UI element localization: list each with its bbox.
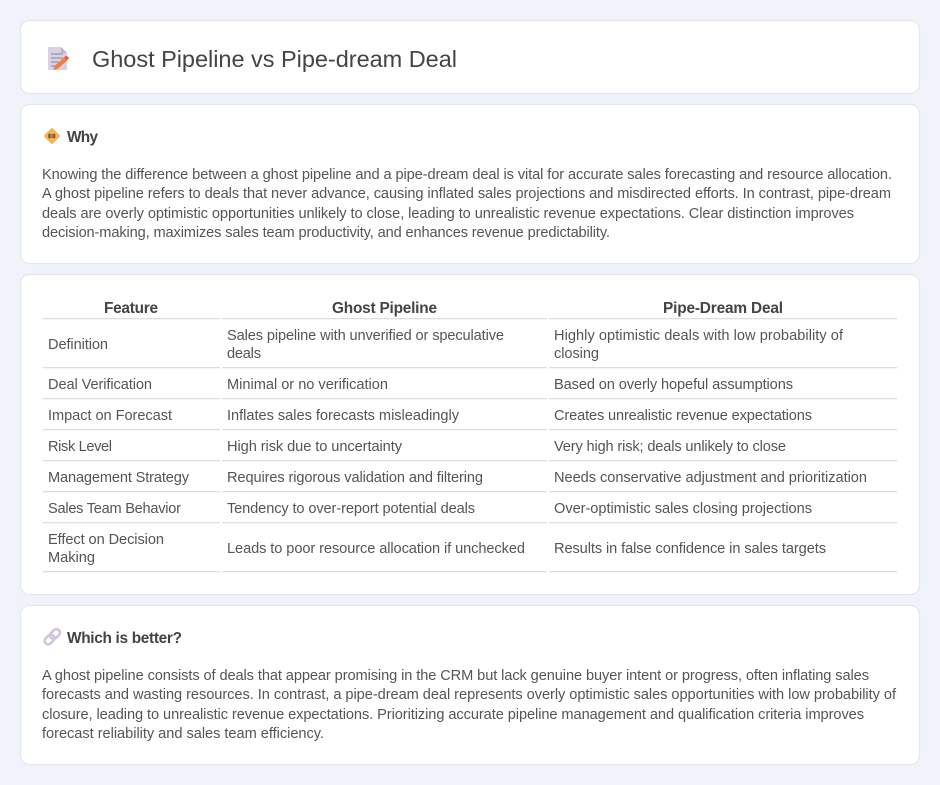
text block: which is better paragraph: closure, leading to unrealistic revenue expectations. Prioritizing accurate pipeline management and qualification criteria improves <box>42 707 864 723</box>
row: impact on forecast: Inflates sales forecasts misleadingly <box>227 408 460 424</box>
row: effect on decision making: Making <box>48 550 95 566</box>
row: effect on decision making: Results in false confidence in sales targets <box>554 541 826 557</box>
row: sales team behavior: Sales Team Behavior <box>48 501 181 517</box>
row: management strategy <box>48 470 867 486</box>
row: impact on forecast <box>48 408 812 424</box>
text block: why paragraph: deals are overly optimistic opportunities unlikely to close, leading to unrealistic revenue expectations. Clear distinction improves <box>42 206 854 222</box>
title: Ghost Pipeline vs Pipe-dream Deal <box>92 46 457 72</box>
panel: comparison table <box>20 274 920 594</box>
row: impact on forecast: Impact on Forecast <box>48 408 172 424</box>
row: sales team behavior: Over-optimistic sales closing projections <box>554 501 812 517</box>
panel: which is better <box>20 606 920 764</box>
text block: which is better paragraph: A ghost pipeline consists of deals that appear promising in the CRM but lack genuine buyer intent or progress, often inflating sales <box>42 668 869 684</box>
table header row: Feature <box>104 300 158 317</box>
text block: why paragraph: Knowing the difference between a ghost pipeline and a pipe-dream deal is vital for accurate sales forecasting and resource allocation. <box>42 167 892 183</box>
text block: which is better paragraph: forecast reliability and sales team efficiency. <box>42 726 324 742</box>
row: risk level: Risk Level <box>48 439 112 455</box>
row: sales team behavior <box>48 501 812 517</box>
row: risk level: Very high risk; deals unlikely to close <box>554 439 786 455</box>
row: deal verification: Based on overly hopeful assumptions <box>554 377 793 393</box>
row: definition: deals <box>227 346 261 362</box>
icon: chain link <box>43 628 61 646</box>
heading: why: Why <box>67 129 98 146</box>
row: deal verification: Minimal or no verification <box>227 377 388 393</box>
row: effect on decision making: Effect on Decision <box>48 532 164 548</box>
text block: which is better paragraph: forecasts and wasting resources. In contrast, a pipe-dream deal represents overly optimistic sales opportunities with low probability of <box>42 687 897 703</box>
table header row: Pipe-Dream Deal <box>663 300 783 317</box>
row: sales team behavior: Tendency to over-report potential deals <box>227 501 475 517</box>
text block: why paragraph <box>42 167 892 241</box>
row: management strategy: Needs conservative adjustment and prioritization <box>554 470 867 486</box>
row: definition: Definition <box>48 337 108 353</box>
panel: title header <box>20 20 920 94</box>
row: impact on forecast: Creates unrealistic revenue expectations <box>554 408 812 424</box>
icon: orange diamond sign <box>44 128 60 144</box>
row: effect on decision making <box>48 532 826 566</box>
table header row: Ghost Pipeline <box>332 300 437 317</box>
row: definition: Highly optimistic deals with low probability of <box>554 328 844 344</box>
row: effect on decision making: Leads to poor resource allocation if unchecked <box>227 541 525 557</box>
table header row <box>104 300 783 317</box>
panel: why <box>20 104 920 264</box>
row: management strategy: Management Strategy <box>48 470 190 486</box>
text block: why paragraph: decision-making, maximizes sales team productivity, and enhances revenue predictability. <box>42 225 610 241</box>
text block: why paragraph: A ghost pipeline refers to deals that never advance, causing inflated sales projections and misdirected efforts. In contrast, pipe-dream <box>42 186 891 202</box>
row: risk level <box>48 439 786 455</box>
text block: which is better paragraph <box>42 668 897 742</box>
row: management strategy: Requires rigorous validation and filtering <box>227 470 483 486</box>
row: deal verification <box>48 377 793 393</box>
row: definition: Sales pipeline with unverified or speculative <box>227 328 504 344</box>
row: definition: closing <box>554 346 599 362</box>
icon: memo with pencil <box>48 47 69 70</box>
row: risk level: High risk due to uncertainty <box>227 439 403 455</box>
row: definition <box>48 328 844 362</box>
row: deal verification: Deal Verification <box>48 377 152 393</box>
heading: which is better: Which is better? <box>67 630 182 647</box>
